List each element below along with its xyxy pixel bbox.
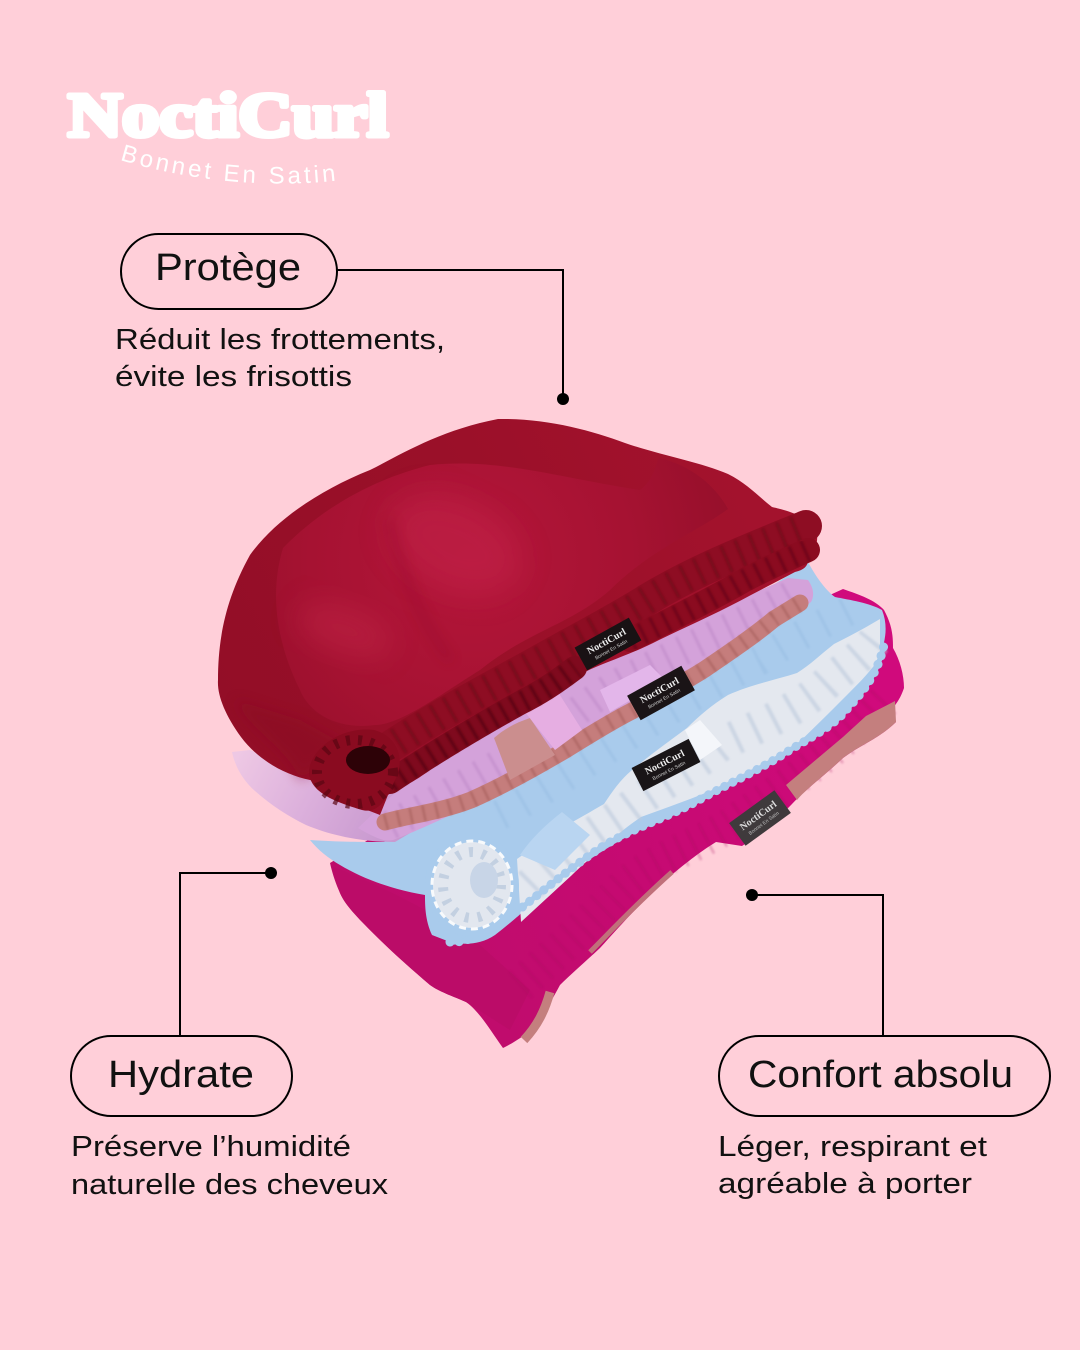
- label: burgundy bonnet: [575, 618, 641, 670]
- callout: Hydrate: naturelle des cheveux: [71, 1169, 389, 1201]
- callout: Protège: Protège: [155, 247, 301, 289]
- ruffle end: [309, 729, 400, 811]
- callout: Hydrate: Préserve l’humidité: [71, 1131, 351, 1163]
- label: lilac bonnet: [627, 666, 695, 720]
- logo: NoctiCurl: [66, 82, 390, 184]
- bonnet stack: [218, 419, 904, 1048]
- inner satin crown: [276, 458, 728, 726]
- callout: Hydrate: [71, 867, 389, 1201]
- callout: Confort absolu: [718, 889, 1050, 1200]
- callout: Confort absolu: agréable à porter: [718, 1168, 972, 1200]
- logo: NoctiCurl: NoctiCurl: [68, 82, 388, 150]
- label: magenta bonnet: Bonnet En Satin: [748, 810, 781, 837]
- callout: Protège: évite les frisottis: [115, 361, 352, 393]
- callout: Hydrate: Hydrate: [108, 1054, 254, 1096]
- label: blue bonnet: [632, 739, 700, 791]
- callout: Confort absolu: Léger, respirant et: [718, 1131, 987, 1163]
- label: burgundy bonnet: Bonnet En Satin: [594, 639, 629, 662]
- label: burgundy bonnet: NoctiCurl: [585, 627, 628, 657]
- rose lining: [786, 701, 896, 800]
- label: blue bonnet: NoctiCurl: [643, 748, 687, 777]
- label: lilac bonnet: Bonnet En Satin: [647, 688, 682, 711]
- callout: Confort absolu: Confort absolu: [748, 1054, 1013, 1096]
- label: magenta bonnet: [729, 790, 791, 846]
- gathered elastic: [385, 526, 806, 750]
- bonnet: light blue: [310, 562, 886, 944]
- label: blue bonnet: Bonnet En Satin: [652, 760, 687, 782]
- bonnet: lilac: [232, 578, 813, 842]
- product labels: [575, 618, 791, 846]
- ruffle end: [425, 833, 519, 937]
- callout: Protège: Réduit les frottements,: [115, 324, 445, 356]
- white ruffle: [517, 619, 880, 922]
- logo: NoctiCurl: Bonnet En Satin: [122, 144, 334, 184]
- bonnet: burgundy: [218, 419, 817, 815]
- label: magenta bonnet: NoctiCurl: [738, 799, 779, 833]
- callout: Protège: [115, 234, 569, 405]
- bonnet: magenta: [330, 589, 904, 1048]
- label: lilac bonnet: NoctiCurl: [638, 676, 681, 706]
